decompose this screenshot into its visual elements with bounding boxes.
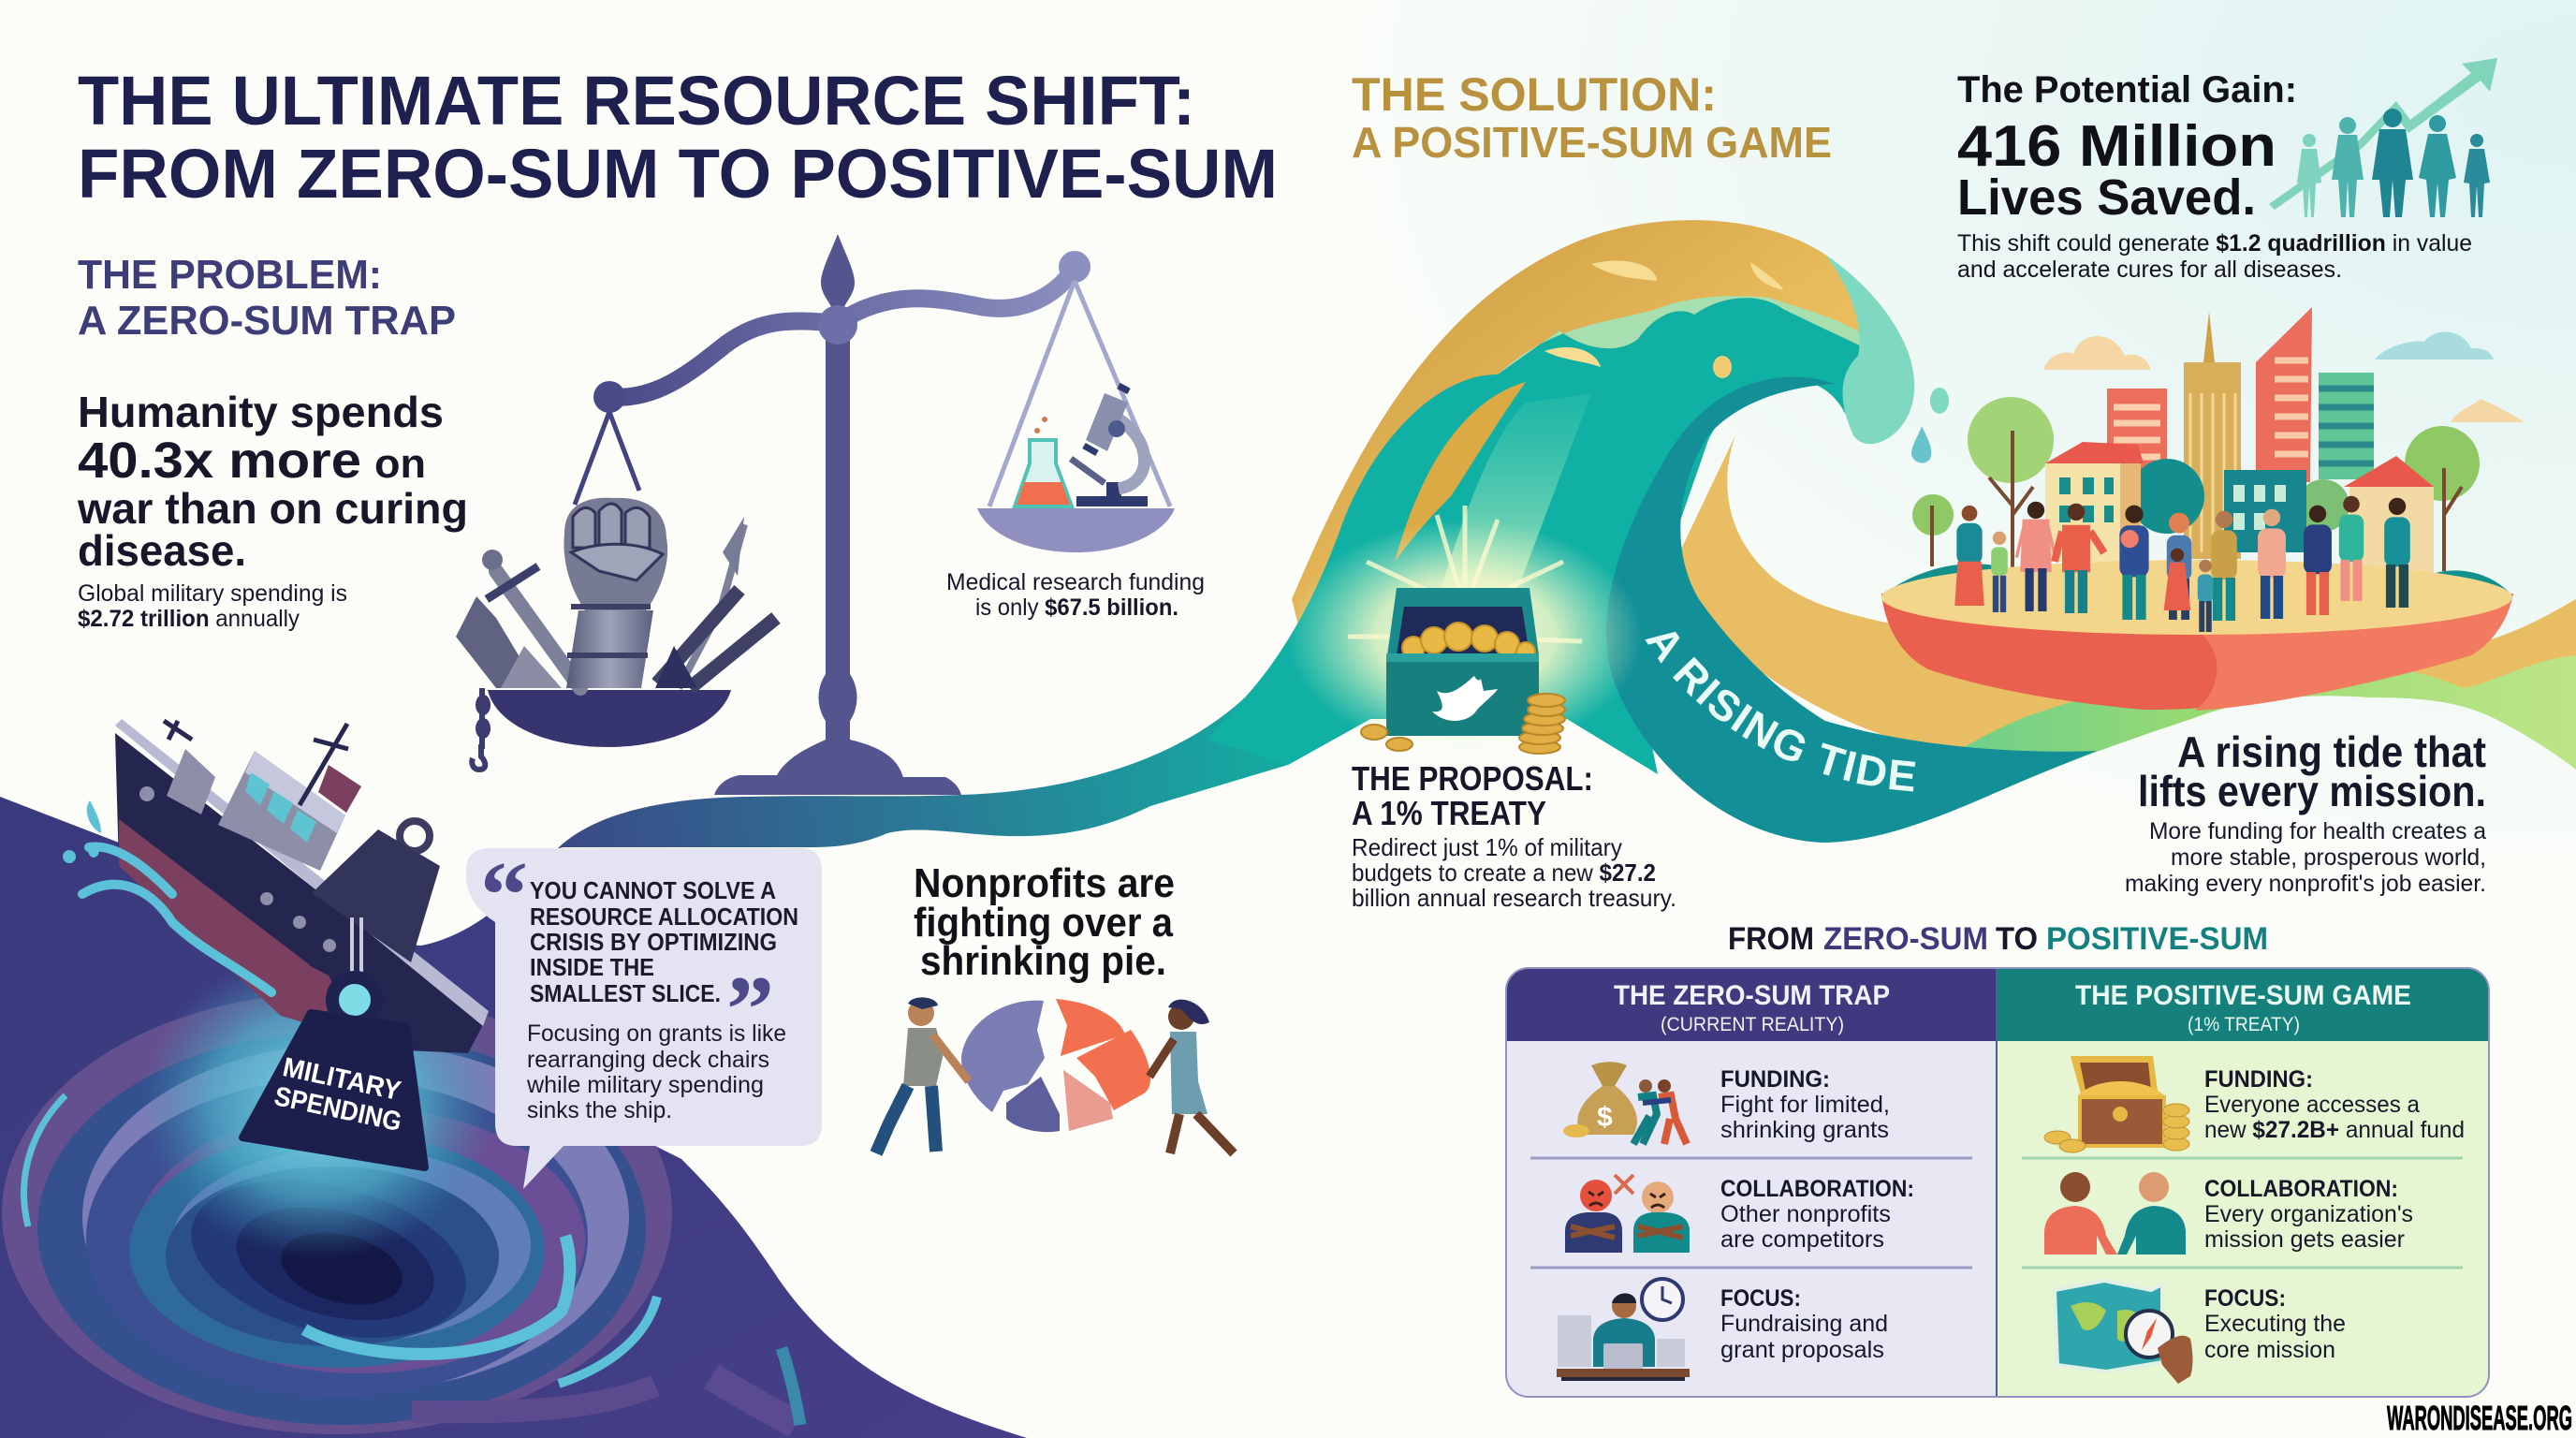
icon: military spending weight xyxy=(242,917,425,1167)
table header: zero-sum trap xyxy=(1614,980,1890,1035)
icon: flask xyxy=(1015,417,1072,506)
text block: potential gain: This shift could generate $1.2 quadrillion in value xyxy=(1957,230,2472,257)
text block: potential gain: Lives Saved. xyxy=(1957,169,2256,226)
text block: potential gain: The Potential Gain: xyxy=(1957,69,2297,110)
icon: people holding hands xyxy=(2044,1172,2186,1255)
icon: money bag and fighters: $ xyxy=(1597,1102,1613,1133)
icon: stressed fundraiser at desk xyxy=(1557,1279,1690,1381)
comparison table xyxy=(1506,968,2489,1397)
heading: from zero-sum to positive-sum: ZERO-SUM xyxy=(1823,921,1988,957)
row: zero-sum collaboration: Other nonprofits xyxy=(1720,1201,1891,1227)
row: zero-sum focus: Fundraising and xyxy=(1720,1311,1888,1337)
text block: rising tide: more stable, prosperous world, xyxy=(2171,844,2486,871)
left scale pan xyxy=(488,690,731,747)
row: positive-sum funding: new $27.2B+ annual fund xyxy=(2204,1117,2465,1143)
row: zero-sum funding: Fight for limited, xyxy=(1720,1092,1890,1118)
row: positive-sum focus: FOCUS: xyxy=(2204,1285,2286,1312)
quote text xyxy=(530,876,798,1007)
quote explanation: rearranging deck chairs xyxy=(527,1047,769,1073)
group of people xyxy=(1954,496,2410,632)
text block: 40.3x statistic: disease. xyxy=(78,526,246,575)
quote explanation: while military spending xyxy=(526,1072,764,1098)
close quote mark: ” xyxy=(726,957,774,1063)
text block: 40.3x statistic: Humanity spends xyxy=(78,388,444,436)
text block: the proposal: THE PROPOSAL: xyxy=(1352,759,1593,798)
icon: map and compass xyxy=(2055,1281,2192,1384)
heading: the problem: THE PROBLEM: xyxy=(78,252,382,298)
icon: second weight behind ship xyxy=(312,821,440,962)
text block: 40.3x statistic: 40.3x more xyxy=(78,433,361,489)
text block: the proposal: budgets to create a new $27.2 xyxy=(1352,858,1656,887)
icon: growth arrow xyxy=(2269,58,2497,210)
text: medical research funding xyxy=(946,569,1205,621)
heading: the solution xyxy=(1352,68,1832,167)
table header: positive-sum game: THE POSITIVE-SUM GAME xyxy=(2075,980,2411,1011)
row: positive-sum funding: FUNDING: xyxy=(2204,1066,2313,1093)
quote text: RESOURCE ALLOCATION xyxy=(530,902,798,931)
text block: rising tide: More funding for health creates a xyxy=(2149,818,2486,844)
quote text: INSIDE THE xyxy=(530,953,654,981)
wave: green ribbon xyxy=(1822,655,2576,843)
water drops xyxy=(1911,388,1949,463)
icon: angry competitors xyxy=(1565,1175,1690,1253)
heading: from zero-sum to positive-sum: POSITIVE-SUM xyxy=(2046,921,2268,957)
text block: the proposal: A 1% TREATY xyxy=(1352,794,1546,832)
text: nonprofits shrinking pie xyxy=(914,860,1175,984)
text block: rising tide: making every nonprofit's job easier. xyxy=(2125,871,2486,897)
table header: positive-sum game: (1% TREATY) xyxy=(2188,1014,2300,1035)
title line 1: THE ULTIMATE RESOURCE SHIFT: xyxy=(78,62,1195,139)
illustration: sinking ship xyxy=(63,719,489,1053)
icon: golden treasure chest xyxy=(2044,1056,2189,1152)
text block: potential gain xyxy=(1957,69,2472,283)
wave: gold under-band xyxy=(1666,435,2576,758)
label: military: MILITARY xyxy=(280,1052,403,1107)
wave: dark teal curl xyxy=(1606,377,2097,843)
text block: 40.3x statistic: Global military spending is xyxy=(78,580,347,607)
row: positive-sum collaboration: COLLABORATION: xyxy=(2204,1176,2398,1202)
row: zero-sum collaboration xyxy=(1720,1176,1914,1253)
row: positive-sum funding: Everyone accesses a xyxy=(2204,1092,2420,1118)
text block: 40.3x statistic xyxy=(77,388,468,632)
text block: potential gain: and accelerate cures for all diseases. xyxy=(1957,257,2342,283)
row: zero-sum funding xyxy=(1720,1066,1890,1143)
right scale pan xyxy=(977,508,1175,552)
illustration: whirlpool of the zero-sum sea xyxy=(0,797,1027,1438)
row: positive-sum collaboration: mission gets easier xyxy=(2204,1226,2405,1253)
quote explanation: sinks the ship. xyxy=(527,1097,672,1123)
text block: the proposal xyxy=(1352,759,1676,912)
quote explanation: Focusing on grants is like xyxy=(527,1020,786,1047)
text: nonprofits shrinking pie: Nonprofits are xyxy=(914,860,1175,906)
text: medical research funding: Medical research funding xyxy=(946,569,1205,595)
illustration: balance scale xyxy=(488,234,1175,795)
text block: rising tide xyxy=(2125,727,2486,897)
table header: zero-sum trap: (CURRENT REALITY) xyxy=(1661,1014,1844,1035)
heading: the problem: A ZERO-SUM TRAP xyxy=(78,298,456,344)
icon: people silhouettes xyxy=(2297,109,2490,217)
row: zero-sum collaboration: are competitors xyxy=(1720,1226,1884,1253)
icon: microscope xyxy=(1071,386,1148,506)
floating island xyxy=(1881,560,2513,711)
quote text: YOU CANNOT SOLVE A xyxy=(530,876,776,904)
text block: rising tide: A rising tide that xyxy=(2177,727,2486,776)
heading: from zero-sum to positive-sum: TO xyxy=(1996,921,2038,957)
text block: rising tide: lifts every mission. xyxy=(2138,767,2486,815)
heading: the problem xyxy=(78,252,456,344)
text block: 40.3x statistic: on xyxy=(374,441,426,487)
table header: positive-sum game xyxy=(2075,980,2411,1035)
heading: the solution: THE SOLUTION: xyxy=(1352,68,1717,121)
text block: 40.3x statistic: war than on curing xyxy=(77,484,468,533)
quote explanation xyxy=(526,1020,786,1123)
heading: from zero-sum to positive-sum: FROM xyxy=(1728,921,1814,957)
text: nonprofits shrinking pie: shrinking pie. xyxy=(920,938,1166,984)
row: zero-sum focus xyxy=(1720,1285,1888,1363)
row: positive-sum collaboration xyxy=(2204,1176,2413,1253)
icon: money bag and fighters xyxy=(1563,1062,1687,1144)
row: positive-sum focus: core mission xyxy=(2204,1337,2335,1363)
text: nonprofits shrinking pie: fighting over a xyxy=(914,900,1173,946)
label: spending: SPENDING xyxy=(271,1081,404,1137)
row: zero-sum collaboration: COLLABORATION: xyxy=(1720,1176,1914,1202)
row: zero-sum funding: FUNDING: xyxy=(1720,1066,1830,1093)
text block: the proposal: billion annual research treasury. xyxy=(1352,884,1676,912)
icon: people fighting over pie xyxy=(876,997,1234,1153)
text block: 40.3x statistic: $2.72 trillion annually xyxy=(78,606,300,632)
icon: armored fist with weapons xyxy=(456,498,776,688)
heading: from zero-sum to positive-sum xyxy=(1728,921,2268,957)
title line 2: FROM ZERO-SUM TO POSITIVE-SUM xyxy=(78,135,1278,213)
open quote mark: “ xyxy=(480,843,528,948)
speech bubble: quote xyxy=(466,843,822,1189)
wave label: A RISING TIDE xyxy=(1645,631,1915,792)
row: positive-sum collaboration: Every organization's xyxy=(2204,1201,2413,1227)
row: positive-sum funding xyxy=(2204,1066,2465,1143)
icon: treasure chest with dove xyxy=(1287,506,1643,754)
heading: the solution: A POSITIVE-SUM GAME xyxy=(1352,118,1832,167)
table header: zero-sum trap: THE ZERO-SUM TRAP xyxy=(1614,980,1890,1011)
icon: hanging chain xyxy=(472,688,488,770)
row: positive-sum focus xyxy=(2204,1285,2346,1363)
illustration: rising tide wave xyxy=(559,220,1914,847)
row: zero-sum funding: shrinking grants xyxy=(1720,1117,1889,1143)
illustration: thriving city xyxy=(1881,307,2525,595)
title xyxy=(78,62,1278,213)
text: medical research funding: is only $67.5 billion. xyxy=(975,594,1178,621)
row: positive-sum focus: Executing the xyxy=(2204,1311,2346,1337)
row: zero-sum focus: FOCUS: xyxy=(1720,1285,1801,1312)
text block: the proposal: Redirect just 1% of military xyxy=(1352,833,1622,861)
quote text: CRISIS BY OPTIMIZING xyxy=(530,928,777,956)
row: zero-sum focus: grant proposals xyxy=(1720,1337,1884,1363)
text block: potential gain: 416 Million xyxy=(1957,114,2276,179)
quote text: SMALLEST SLICE. xyxy=(530,979,721,1007)
background tint: upper right xyxy=(1217,0,2576,927)
